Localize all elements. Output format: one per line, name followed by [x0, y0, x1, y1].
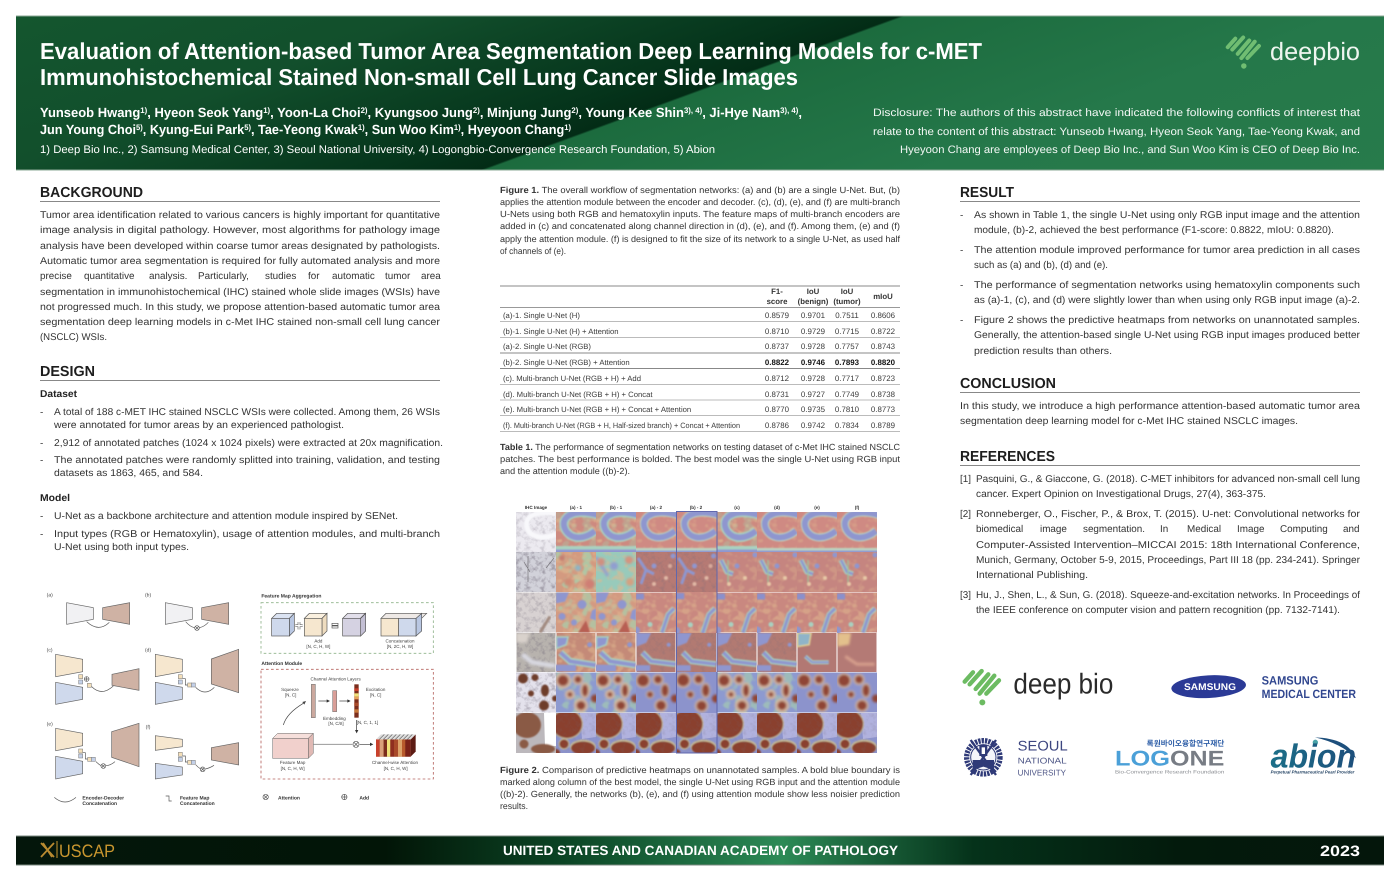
logo: logone: Bio-Convergence Research Foundation	[1115, 769, 1224, 775]
attention module: [N, C]	[285, 693, 296, 698]
logo: logone: 록원바이오융합연구재단	[1147, 739, 1224, 748]
text: background: automatic	[332, 271, 378, 282]
table rows: 0.8822	[765, 358, 790, 367]
table header: (benign)	[798, 297, 829, 306]
list: model: U-Net as a backbone architecture and attention module inspired by SENet.	[54, 511, 398, 522]
column labels: (a) - 1	[570, 505, 583, 510]
table rows: 0.9727	[801, 390, 825, 399]
list: references: and	[1343, 524, 1359, 535]
authors: 3), 4)	[684, 106, 703, 115]
panel: design	[40, 364, 443, 553]
legend: operators	[263, 794, 369, 801]
caption: figure 2	[500, 765, 901, 811]
authors: , Kyung-Eui Park	[143, 122, 245, 137]
list: dataset: datasets as 1863, 465, and 584.	[54, 468, 203, 479]
logo: abion: abion	[1271, 737, 1356, 775]
authors: , Tae-Yeong Kwak	[251, 122, 358, 137]
diagram: aggregation and attention module	[261, 593, 433, 801]
legend: operators: Add	[359, 795, 369, 801]
feature map aggregation: Concatenation	[385, 638, 415, 643]
attention module: [N, C, 1, 1]	[357, 720, 378, 725]
table rows: 0.8738	[871, 390, 896, 399]
table rows: 0.7893	[835, 358, 860, 367]
authors: 1)	[263, 106, 270, 115]
authors: , Young Kee Shin	[578, 105, 684, 120]
network (b): (b)	[145, 592, 151, 598]
logo: logone	[1115, 739, 1224, 775]
table rows: 0.7834	[835, 421, 860, 430]
authors: Jun Young Choi	[40, 122, 141, 137]
column labels: (c)	[734, 505, 740, 510]
table rows: 0.7715	[835, 327, 860, 336]
text: background: segmentation in immunohistochemical (IHC) stained whole slide images (WSIs) have	[40, 287, 441, 298]
logo: samsung medical center	[1171, 673, 1356, 701]
logo: seoul national university: SEOUL	[1018, 738, 1068, 754]
list: references: segmentation.	[1083, 524, 1148, 535]
panel: conclusion	[960, 376, 1361, 427]
caption: figure 1: of channels of (e).	[500, 246, 566, 256]
list: references: Ronneberger, O., Fischer, P., & Brox, T. (2015). U-net: Convolutional networks for	[976, 509, 1361, 520]
table rows: 0.7757	[835, 342, 859, 351]
heatmap grid: predictive heatmaps	[513, 505, 880, 757]
authors: , Hyeyoon Chang	[461, 122, 564, 137]
list: references: Computer-Assisted Intervention–MICCAI 2015: 18th International Conference,	[976, 540, 1360, 551]
disclosure	[873, 107, 1360, 156]
logo group: partners	[965, 668, 1356, 778]
list: references: [3]	[960, 590, 971, 601]
list: dataset: -	[40, 455, 43, 466]
logo: deepbio	[965, 668, 1113, 705]
attention module: Channel Attention Layers	[311, 676, 361, 681]
authors: 5)	[136, 123, 143, 132]
caption: table 1: patches. The best performance is bolded. The best model was the single U-Net using RGB input	[500, 454, 901, 464]
list: results: -	[960, 280, 963, 291]
logo: samsung medical center: SAMSUNG	[1184, 682, 1236, 692]
authors: , Ji-Hye Nam	[702, 105, 780, 120]
list: references: Image	[1237, 524, 1267, 535]
text: background: Tumor area identification related to various cancers is highly important for quantitative	[40, 210, 441, 221]
table rows: (a)-1. Single U-Net (H)	[503, 311, 580, 320]
authors: 1)	[358, 123, 365, 132]
list: dataset	[40, 407, 443, 479]
caption: table 1: and the attention module ((b)-2).	[500, 466, 630, 476]
list: references: Munich, Germany, October 5-9, 2015, Proceedings, Part III 18 (pp. 234-241). Springer	[976, 555, 1361, 566]
caption: figure 2: ((b)-2). Generally, the networks (b), (e), and (f) using attention module show less noisier prediction	[500, 789, 900, 799]
subheading: model: Model	[40, 493, 70, 504]
column labels: (a) - 2	[650, 505, 663, 510]
list: model: Input types (RGB or Hematoxylin), usage of attention modules, and multi-branch	[54, 529, 440, 540]
disclosure: Hyeyoon Chang are employees of Deep Bio Inc., and Sun Woo Kim is CEO of Deep Bio Inc.	[900, 144, 1360, 156]
table rows: 0.7717	[835, 374, 859, 383]
table header: IoU	[841, 287, 854, 296]
title: Evaluation of Attention-based Tumor Area Segmentation Deep Learning Models for c-MET	[40, 38, 982, 64]
list: results: Generally, the attention-based single U-Net using RGB input images produced better	[974, 330, 1361, 341]
list: results: such as (a) and (b), (d) and (e).	[974, 260, 1108, 271]
text: background: segmentation deep learning models in c-Met IHC stained non-small cell lung cancer	[40, 317, 441, 328]
logo: seoul national university: NATIONAL	[1018, 756, 1067, 766]
heading: result: RESULT	[960, 185, 1014, 201]
authors: Yunseob Hwang	[40, 105, 143, 120]
table header: score	[767, 297, 788, 306]
authors: 1)	[140, 106, 148, 115]
list: results: module, (b)-2, achieved the best performance (F1-score: 0.8822, mIoU: 0.8820).	[974, 225, 1334, 236]
logo: logone: ONE	[1170, 746, 1224, 770]
text: background: analysis.	[149, 271, 190, 282]
text: conclusion: segmentation deep learning model for c-Met IHC stained NSCLC images.	[960, 416, 1298, 427]
text: background: studies	[265, 271, 299, 282]
legend: concatenation: Concatenation	[82, 801, 117, 806]
attention module: [N, C, H, W]	[384, 766, 408, 771]
text: background: for	[308, 271, 322, 282]
logo: seoul national university	[967, 738, 1068, 778]
authors: 2)	[473, 106, 480, 115]
list: references: biomedical	[976, 524, 1026, 535]
list: results: As shown in Table 1, the single U-Net using only RGB input image and the attention	[974, 210, 1360, 221]
table rows: 0.8820	[871, 358, 896, 367]
column labels: IHC Image	[525, 505, 548, 510]
list: dataset: -	[40, 438, 43, 449]
authors: 2)	[571, 106, 579, 115]
authors: ,	[798, 105, 802, 120]
list: results: The performance of segmentation networks using hematoxylin components such	[974, 280, 1360, 291]
table rows: 0.8606	[871, 311, 896, 320]
caption: figure 2: results.	[500, 801, 528, 811]
text: background: image analysis in digital pathology. However, most algorithms for pathology image	[40, 225, 441, 236]
caption: table 1: Table 1. The performance of segmentation networks on testing dataset of c-Met IHC stained NSCLC	[500, 442, 901, 452]
footer title: UNITED STATES AND CANADIAN ACADEMY OF PATHOLOGY	[503, 843, 898, 858]
list: model	[40, 511, 440, 553]
attention module: Feature Map	[280, 760, 305, 765]
attention module: [N, C, H, W]	[281, 766, 305, 771]
list: model: -	[40, 529, 43, 540]
network (f)	[146, 724, 239, 779]
authors: 1)	[564, 123, 571, 132]
table rows: 0.8710	[765, 327, 790, 336]
attention module: Attention Module	[261, 661, 302, 666]
feature map aggregation: Feature Map Aggregation	[261, 593, 321, 599]
caption: figure 1: U-Nets using both RGB and hematoxylin inputs. The feature maps of multi-branch encoders are	[500, 209, 900, 219]
text: background: not progressed much. In this study, we propose attention-based automatic tumor area	[40, 302, 441, 313]
text: background: (NSCLC) WSIs.	[40, 332, 107, 343]
table rows	[503, 311, 896, 430]
logo: deepbio: deep bio	[1013, 668, 1113, 700]
list: references: [2]	[960, 509, 971, 520]
logo: logone: LOG	[1115, 746, 1170, 770]
text: background: precise	[40, 271, 75, 282]
attention module: Channel-wise Attention	[372, 760, 418, 765]
list: references: Pasquini, G., & Giaccone, G. (2018). C-MET inhibitors for advanced non-small cell lung	[976, 474, 1360, 485]
disclosure: Disclosure: The authors of this abstract have indicated the following conflicts of interest that	[873, 107, 1360, 119]
caption: figure 2: Figure 2. Comparison of predictive heatmaps on unannotated samples. A bold blue boundary is	[500, 765, 901, 775]
feature map aggregation: [N, 2C, H, W]	[387, 644, 413, 649]
table rows: 0.8770	[765, 405, 790, 414]
legend: concatenation: Concatenation	[180, 801, 215, 806]
attention module: [N, C]	[370, 693, 381, 698]
authors	[40, 105, 802, 137]
list: results	[960, 210, 1361, 357]
list: references: [1]	[960, 474, 971, 485]
attention module	[261, 661, 433, 779]
list: results: The attention module improved performance for tumor area prediction in all cases	[974, 245, 1360, 256]
heading: design: DESIGN	[40, 364, 95, 380]
network (e): (e)	[47, 721, 53, 727]
feature map aggregation: [N, C, H, W]	[306, 644, 330, 649]
list: results: -	[960, 315, 963, 326]
heading: background: BACKGROUND	[40, 185, 143, 201]
table rows: 0.8712	[765, 374, 789, 383]
footer year: 2023	[1320, 843, 1360, 860]
column labels	[525, 505, 860, 510]
list: results: as (a)-1, (c), and (d) were slightly lower than when using only RGB input image (a)-2.	[974, 295, 1360, 306]
list: model: U-Net using both input types.	[54, 542, 189, 553]
heading: references: REFERENCES	[960, 449, 1055, 465]
list: results: Figure 2 shows the predictive heatmaps from networks on unannotated samples.	[974, 315, 1360, 326]
logo: uscap	[41, 841, 115, 861]
list: dataset: -	[40, 407, 43, 418]
legend: concatenation: Feature Map	[180, 795, 209, 801]
table rows: 0.9746	[801, 358, 826, 367]
heading: conclusion: CONCLUSION	[960, 376, 1056, 392]
table rows: 0.9729	[801, 327, 826, 336]
column labels: (b) - 1	[610, 505, 623, 510]
network (e)	[47, 721, 139, 779]
table rows: 0.8722	[871, 327, 895, 336]
caption: figure 1: Figure 1. The overall workflow of segmentation networks: (a) and (b) are a single U-Net. But, (b)	[500, 185, 900, 195]
table rows: 0.7511	[835, 311, 859, 320]
table rows: 0.8723	[871, 374, 896, 383]
list: references: In	[1160, 524, 1171, 535]
panel: result	[960, 185, 1361, 357]
attention module: Squeeze	[281, 687, 299, 692]
logo: uscap: USCAP	[59, 841, 115, 861]
table rows: 0.9728	[801, 342, 826, 351]
table rows: (d). Multi-branch U-Net (RGB + H) + Concat	[503, 390, 653, 399]
table rows: 0.8731	[765, 390, 789, 399]
footer banner	[16, 836, 1384, 866]
affiliations: 1) Deep Bio Inc., 2) Samsung Medical Center, 3) Seoul National University, 4) Logongbio-Convergence Research Foundation, 5) Abion	[40, 144, 715, 156]
text: background: quantitative	[84, 271, 137, 282]
header banner	[16, 16, 1384, 170]
logo: samsung medical center: MEDICAL CENTER	[1262, 687, 1356, 701]
text: background: tumor	[385, 271, 413, 282]
text: background: analysis have been developed within coarse tumor areas designated by pathologists.	[40, 241, 440, 252]
authors: , Yoon-La Choi	[270, 105, 361, 120]
table rows: (b)-2. Single U-Net (RGB) + Attention	[503, 358, 630, 367]
list: references	[960, 474, 1361, 616]
list: dataset: 2,912 of annotated patches (1024 x 1024 pixels) were extracted at 20x magnification.	[54, 438, 443, 449]
table rows: 0.9735	[801, 405, 826, 414]
table rows: 0.8789	[871, 421, 896, 430]
legend: operators: Attention	[278, 795, 300, 801]
network (d): (d)	[145, 647, 151, 653]
table rows: 0.9701	[801, 311, 825, 320]
panel: background	[40, 185, 441, 343]
table header: IoU	[807, 287, 820, 296]
feature map aggregation: Add	[314, 638, 322, 643]
subheading: dataset: Dataset	[40, 389, 78, 400]
table rows: (b)-1. Single U-Net (H) + Attention	[503, 327, 619, 336]
text: background	[40, 210, 441, 343]
table rows: 0.8773	[871, 405, 896, 414]
network (f): (f)	[146, 724, 150, 730]
list: references: cancer. Expert Opinion on Investigational Drugs, 27(4), 363-375.	[976, 489, 1266, 500]
list: model: -	[40, 511, 43, 522]
table rows: 0.7749	[835, 390, 860, 399]
list: results: -	[960, 210, 963, 221]
authors: 1)	[454, 123, 461, 132]
legend: concatenation: Encoder-Decoder	[82, 795, 124, 801]
logo: deepbio header: deepbio	[1270, 38, 1360, 66]
authors: , Minjung Jung	[480, 105, 571, 120]
table rows: 0.7810	[835, 405, 860, 414]
network (a)	[47, 592, 130, 627]
network (d)	[145, 647, 239, 704]
column labels: (e)	[814, 505, 820, 510]
table rows: 0.8786	[765, 421, 790, 430]
title: Immunohistochemical Stained Non-small Cell Lung Cancer Slide Images	[40, 64, 798, 90]
list: references: image	[1040, 524, 1070, 535]
authors: 2)	[361, 106, 368, 115]
table header: (tumor)	[833, 297, 861, 306]
attention module: Embedding	[323, 716, 346, 721]
logo: abion: Perpetual Pharmaceutical Pearl Provider	[1271, 770, 1355, 775]
table header: mIoU	[873, 292, 893, 301]
logo: seoul national university: UNIVERSITY	[1018, 768, 1066, 778]
authors: 5)	[244, 123, 251, 132]
title	[40, 38, 982, 90]
text: background: area	[421, 271, 441, 282]
logo: deepbio header	[1228, 37, 1360, 69]
table: model performance	[500, 286, 900, 432]
list: results: prediction results than others.	[974, 346, 1112, 357]
list: references: International Publishing.	[976, 570, 1088, 581]
list: references: Medical	[1187, 524, 1224, 535]
network (c): (c)	[47, 647, 52, 653]
logo: samsung medical center: SAMSUNG	[1262, 674, 1318, 687]
table rows: 0.8737	[765, 342, 789, 351]
authors: , Kyungsoo Jung	[368, 105, 473, 120]
list: dataset: were annotated for tumor areas by an experienced pathologist.	[53, 420, 344, 431]
column labels: (f)	[855, 505, 860, 510]
list: references: the IEEE conference on computer vision and pattern recognition (pp. 7132-7141).	[976, 605, 1340, 616]
table rows: 0.8579	[765, 311, 790, 320]
text: background: Automatic tumor area segmentation is required for fully automated analysis and more	[40, 256, 441, 267]
feature map aggregation	[261, 593, 433, 653]
attention module: Excitation	[366, 687, 385, 692]
table rows: (e). Multi-branch U-Net (RGB + H) + Concat + Attention	[503, 405, 691, 414]
text: conclusion: In this study, we introduce a high performance attention-based automatic tumor area	[960, 401, 1361, 412]
attention module: [N, C/8]	[328, 721, 344, 726]
caption: figure 1: apply the attention module. (f) is designed to fit the size of its network to a single U-Net, as used half	[500, 234, 901, 244]
network (c)	[47, 647, 139, 704]
table rows: 0.8743	[871, 342, 896, 351]
network (a): (a)	[47, 592, 53, 598]
text: background: Particularly,	[198, 271, 252, 282]
table header	[767, 287, 893, 306]
caption: figure 2: marked along column of the best model, the single U-Net using RGB input and the attention module	[500, 777, 900, 787]
text: conclusion	[960, 401, 1361, 427]
column labels: (d)	[774, 505, 780, 510]
table rows: 0.9742	[801, 421, 825, 430]
legend: concatenation	[54, 795, 215, 806]
list: dataset: The annotated patches were randomly splitted into training, validation, and testing	[54, 455, 440, 466]
table rows: 0.9728	[801, 374, 826, 383]
column labels: (b) - 2	[690, 505, 703, 510]
network (b)	[145, 592, 229, 630]
authors: , Sun Woo Kim	[365, 122, 454, 137]
caption: figure 1: applies the attention module between the encoder and decoder. (c), (d), (e), and (f) are multi-branch	[500, 197, 900, 207]
list: references: Hu, J., Shen, L., & Sun, G. (2018). Squeeze-and-excitation networks. In Proceedings of	[976, 590, 1360, 601]
list: references: Computing	[1280, 524, 1330, 535]
table header: F1-	[771, 287, 783, 296]
list: results: -	[960, 245, 963, 256]
table rows: (c). Multi-branch U-Net (RGB + H) + Add	[503, 374, 641, 383]
table rows: (a)-2. Single U-Net (RGB)	[503, 342, 591, 351]
authors: , Hyeon Seok Yang	[147, 105, 263, 120]
caption: figure 1: added in (c) and concatenated along channel direction in (d), (e), and (f). Among them, (e) and (f)	[500, 221, 900, 231]
caption: table 1	[500, 442, 901, 476]
disclosure: relate to the content of this abstract: Yunseob Hwang, Hyeon Seok Yang, Tae-Yeong Kwak, and	[873, 126, 1360, 138]
caption: figure 1	[500, 185, 901, 256]
panel: references	[960, 449, 1361, 616]
diagram: network architectures	[47, 592, 239, 806]
table rows: (f). Multi-branch U-Net (RGB + H, Half-sized branch) + Concat + Attention	[503, 421, 740, 430]
authors: 3), 4)	[780, 106, 799, 115]
list: dataset: A total of 188 c-MET IHC stained NSCLC WSIs were collected. Among them, 26 WSIs	[54, 407, 440, 418]
